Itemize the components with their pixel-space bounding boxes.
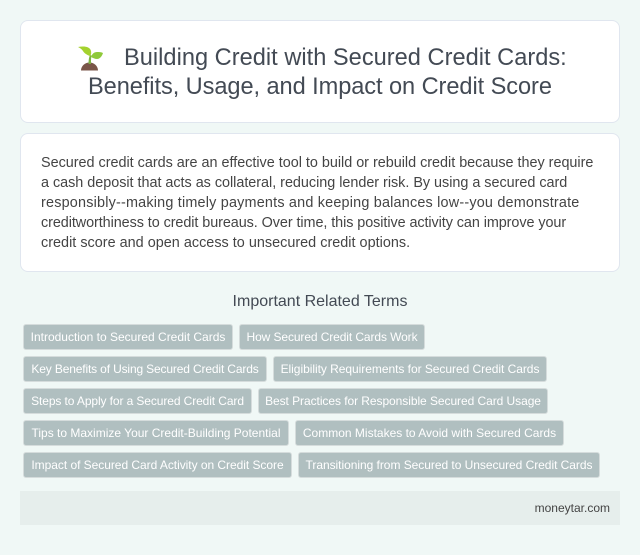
heading: title line 1: Building Credit with Secured Credit Cards: — [124, 45, 567, 71]
tag — [258, 388, 548, 414]
tag: Impact of Secured Card Activity on Credit Score — [31, 458, 284, 472]
tag — [295, 420, 564, 446]
tag: Tips to Maximize Your Credit-Building Potential — [31, 426, 280, 440]
tag: Common Mistakes to Avoid with Secured Cards — [303, 426, 556, 440]
tag: How Secured Credit Cards Work — [247, 330, 417, 344]
text block: description: Secured credit cards are an effective tool to build or rebuild credit because they require — [41, 155, 593, 171]
tag — [23, 356, 267, 382]
text block: description: responsibly--making timely payments and keeping balances low--you demonstrate — [41, 195, 580, 211]
tag — [23, 324, 233, 350]
heading: title line 2: Benefits, Usage, and Impact on Credit Score — [88, 74, 552, 100]
tag: Introduction to Secured Credit Cards — [31, 330, 225, 344]
footer text: moneytar.com: moneytar.com — [535, 501, 610, 515]
icon: seedling — [78, 46, 103, 70]
tag: Transitioning from Secured to Unsecured Credit Cards — [306, 458, 592, 472]
tag — [273, 356, 547, 382]
text block: description — [41, 155, 593, 251]
panel: description card — [20, 133, 620, 272]
tag: Best Practices for Responsible Secured Card Usage — [265, 394, 541, 408]
tag: Key Benefits of Using Secured Credit Cards — [31, 362, 259, 376]
tag: Steps to Apply for a Secured Credit Card — [31, 394, 244, 408]
text block: description: creditworthiness to credit bureaus. Over time, this positive activity can improve your — [41, 215, 566, 231]
list: related term tags — [23, 324, 600, 478]
tag — [23, 388, 252, 414]
tag — [23, 452, 292, 478]
tag — [239, 324, 425, 350]
text block: description: credit score and open access to unsecured credit options. — [41, 235, 410, 251]
tag — [23, 420, 289, 446]
footer bar — [20, 491, 620, 525]
panel: title card — [20, 20, 620, 123]
heading: important related terms: Important Related Terms — [233, 293, 407, 310]
text block: description: a cash deposit that acts as collateral, reducing lender risk. By using a secured card — [41, 175, 567, 191]
tag: Eligibility Requirements for Secured Credit Cards — [281, 362, 539, 376]
tag — [298, 452, 600, 478]
